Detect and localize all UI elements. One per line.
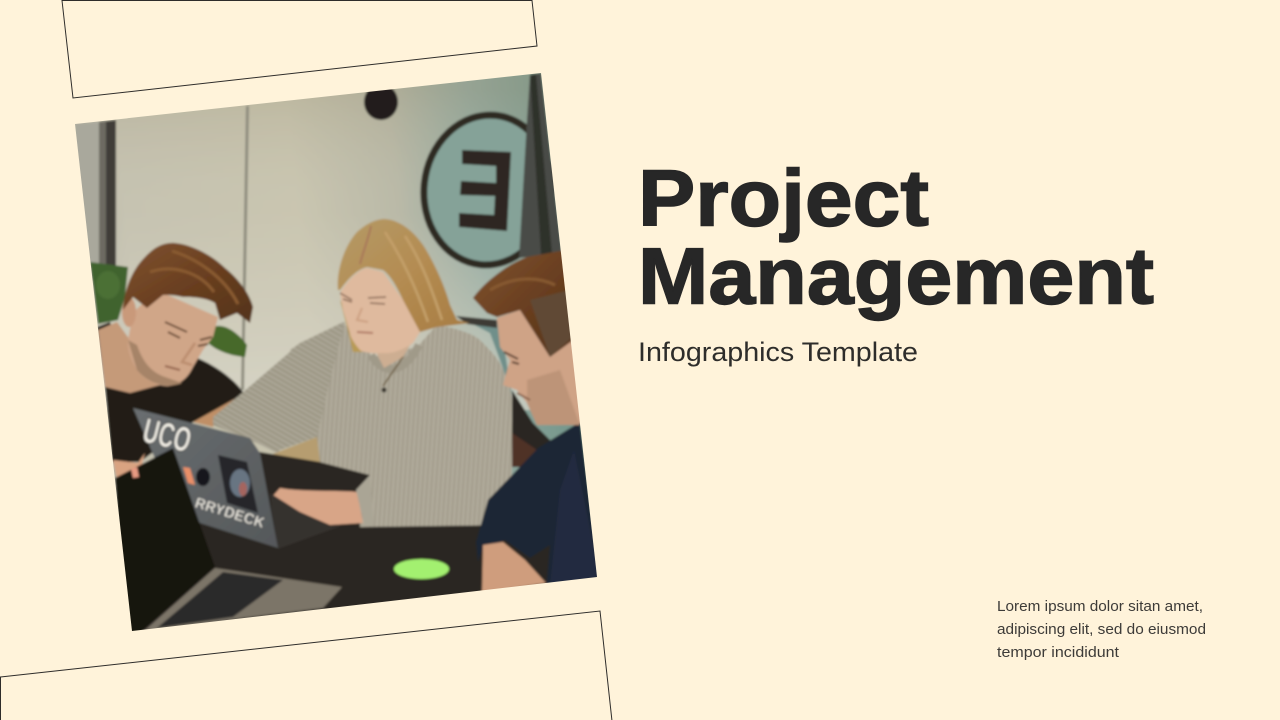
right man eye xyxy=(504,352,519,364)
sticker word: RRYDECK xyxy=(193,495,267,532)
woman hair xyxy=(338,219,470,332)
woman neck xyxy=(376,346,410,368)
left man shirt xyxy=(97,322,243,462)
plant leaf xyxy=(207,326,247,357)
left man hand xyxy=(113,453,145,480)
woman eyes xyxy=(340,293,386,304)
left man nose shadow xyxy=(182,343,195,365)
left man beard xyxy=(128,340,182,385)
sticker logo: UCO xyxy=(139,410,195,460)
black laptop screen xyxy=(115,448,215,640)
body line 3: tempor incididunt xyxy=(997,644,1120,661)
black laptop keys xyxy=(157,572,283,628)
sticker orange xyxy=(183,467,195,485)
chair red xyxy=(512,433,537,467)
wood table edge behind arm xyxy=(273,436,321,464)
title line 1: Project xyxy=(638,154,929,242)
left man mouth xyxy=(165,366,180,370)
mirrored logo letter xyxy=(459,150,511,231)
left man ear xyxy=(122,297,136,327)
decorative frame: top outline xyxy=(62,0,537,98)
table xyxy=(118,450,552,630)
pink sticker xyxy=(131,467,139,478)
poster sticker mouth xyxy=(239,482,247,496)
woman left hair strip xyxy=(340,300,363,352)
window strip left xyxy=(75,122,99,280)
woman sweater body xyxy=(290,322,512,527)
poster sticker detail xyxy=(230,469,250,497)
woman nose xyxy=(357,308,368,322)
body text block xyxy=(997,598,1206,661)
left man brow and eye xyxy=(165,322,212,346)
woman face xyxy=(340,268,420,353)
right man hand xyxy=(482,542,546,593)
left man neck xyxy=(98,322,160,393)
mirrored logo circle xyxy=(417,109,559,271)
body line 1: Lorem ipsum dolor sitan amet, xyxy=(997,598,1203,615)
title line 2: Management xyxy=(638,232,1154,320)
necklace xyxy=(383,357,403,386)
poster sticker xyxy=(218,455,258,513)
wall panel seam xyxy=(241,106,249,390)
necklace pendant xyxy=(382,388,386,392)
left man face xyxy=(122,293,218,386)
plant xyxy=(90,262,128,324)
left man arm xyxy=(193,397,236,428)
right man hair xyxy=(473,250,580,357)
body line 2: adipiscing elit, sed do eiusmod xyxy=(997,621,1206,638)
window frame left xyxy=(99,120,116,272)
decorative frame: bottom outline xyxy=(0,611,612,720)
photo: team working around laptops xyxy=(70,70,600,640)
apple mark xyxy=(196,468,210,486)
right man stubble xyxy=(527,370,580,425)
woman hand xyxy=(272,488,363,525)
left man hair xyxy=(123,243,253,323)
woman mouth xyxy=(357,332,373,333)
black laptop base xyxy=(143,568,342,632)
right man sweater xyxy=(476,422,600,590)
ceiling lamp xyxy=(364,84,398,120)
title xyxy=(638,154,1154,320)
photo wall xyxy=(75,73,587,520)
dark chair between woman and right man xyxy=(510,390,552,451)
subtitle: Infographics Template xyxy=(638,337,918,367)
right man face xyxy=(497,310,585,425)
right man mouth xyxy=(517,393,530,400)
gray laptop lid xyxy=(133,408,278,548)
gray laptop keyboard base xyxy=(270,493,341,549)
cabinet behind right man xyxy=(456,316,512,395)
sweater cuff xyxy=(356,475,374,527)
dark column right xyxy=(519,73,562,258)
gray laptop stickers xyxy=(139,410,267,532)
sweater collar xyxy=(371,345,419,369)
green disc on table xyxy=(394,559,449,579)
woman sweater sleeve xyxy=(213,322,345,453)
